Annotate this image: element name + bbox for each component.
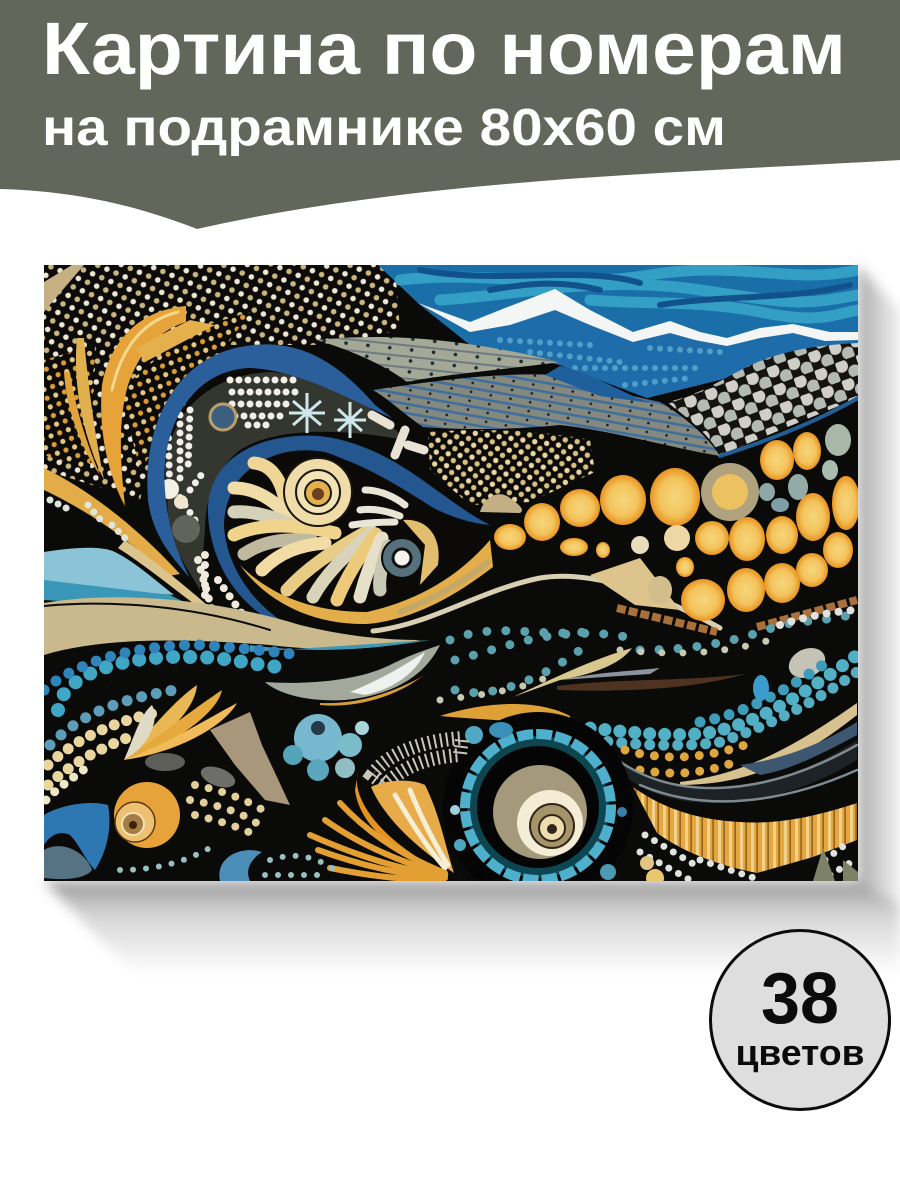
- shell scallop: [403, 520, 439, 585]
- blue shell bottom: [219, 850, 262, 881]
- wave body: [559, 364, 726, 398]
- gold fringe: [633, 787, 857, 873]
- brown tile strip right: [617, 600, 857, 632]
- corner leaf: [813, 848, 858, 881]
- gold dots under ribbon: [625, 745, 745, 773]
- badge: 38 colours: [710, 930, 890, 1110]
- badge label: цветов: [736, 1032, 864, 1073]
- grey wedge: [145, 712, 290, 805]
- star flowers: [289, 393, 366, 438]
- light blue wedge: [44, 548, 174, 595]
- sea: [378, 265, 858, 398]
- subtitle: на подрамнике 80х60 см: [42, 99, 726, 157]
- blue line: [720, 398, 858, 456]
- gold stripe mid: [440, 704, 570, 730]
- cream stripes corner: [44, 265, 84, 312]
- painting: [44, 265, 860, 902]
- teal dot ribbon: [575, 655, 857, 745]
- central shell: [228, 456, 439, 606]
- shell with teal ring: [443, 712, 633, 902]
- right dark waves: [610, 722, 857, 803]
- pale pebbles: [164, 479, 179, 499]
- blue flower: [283, 714, 369, 781]
- orange shell bottom left: [114, 782, 180, 848]
- cream jagged line: [680, 703, 857, 785]
- sparse dots upper mid: [440, 610, 855, 700]
- gold left stripe: [44, 468, 180, 576]
- shell ribs lower: [287, 530, 370, 590]
- fan shell: [310, 772, 454, 880]
- blue swirl inner: [208, 436, 490, 619]
- dot field: left gold: [44, 312, 250, 470]
- gold feather: [64, 306, 215, 506]
- blue swirl outer: [147, 344, 392, 578]
- orange pebbles: [494, 432, 860, 621]
- tan and pale stones: [480, 424, 851, 684]
- speckles beside stripe: [50, 500, 125, 538]
- gold ribbon: [240, 540, 493, 624]
- dot field: top left: [44, 265, 400, 500]
- teal dot band second row: [44, 645, 300, 690]
- shell ribs upper: [254, 463, 287, 510]
- white speckle clusters: [168, 380, 300, 520]
- grey swoosh lower: [373, 366, 720, 456]
- cream stripe: [118, 541, 206, 604]
- dot band lower left: [46, 690, 175, 800]
- teal under wedge: [44, 580, 182, 601]
- canvas shadow: [44, 265, 900, 975]
- grey swoosh upper: [317, 337, 560, 382]
- white dots under fringe: [640, 835, 855, 887]
- blue ring: [210, 404, 236, 430]
- brush streaks: [513, 648, 745, 697]
- feather band left: [44, 597, 430, 655]
- teal dot band: [58, 657, 290, 710]
- white ribs: [352, 490, 405, 525]
- swirl interior: [159, 372, 424, 625]
- cream dot field: [428, 430, 595, 505]
- gold leaf fan: [124, 685, 237, 760]
- blue shell bottom left: [44, 803, 109, 879]
- header banner: [0, 0, 900, 229]
- grey blade: [265, 645, 440, 706]
- white and gold wave: [373, 576, 720, 631]
- dot cluster bottom: [190, 785, 270, 835]
- dot cluster bottom row: [120, 845, 335, 875]
- white wave crests: [418, 289, 858, 346]
- striped arc: [372, 738, 462, 785]
- shell spiral large: [284, 458, 352, 526]
- title: Картина по номерам: [42, 7, 846, 90]
- badge number: 38: [761, 959, 839, 1039]
- pebble hill: [667, 343, 858, 456]
- shell spiral small: [382, 538, 422, 578]
